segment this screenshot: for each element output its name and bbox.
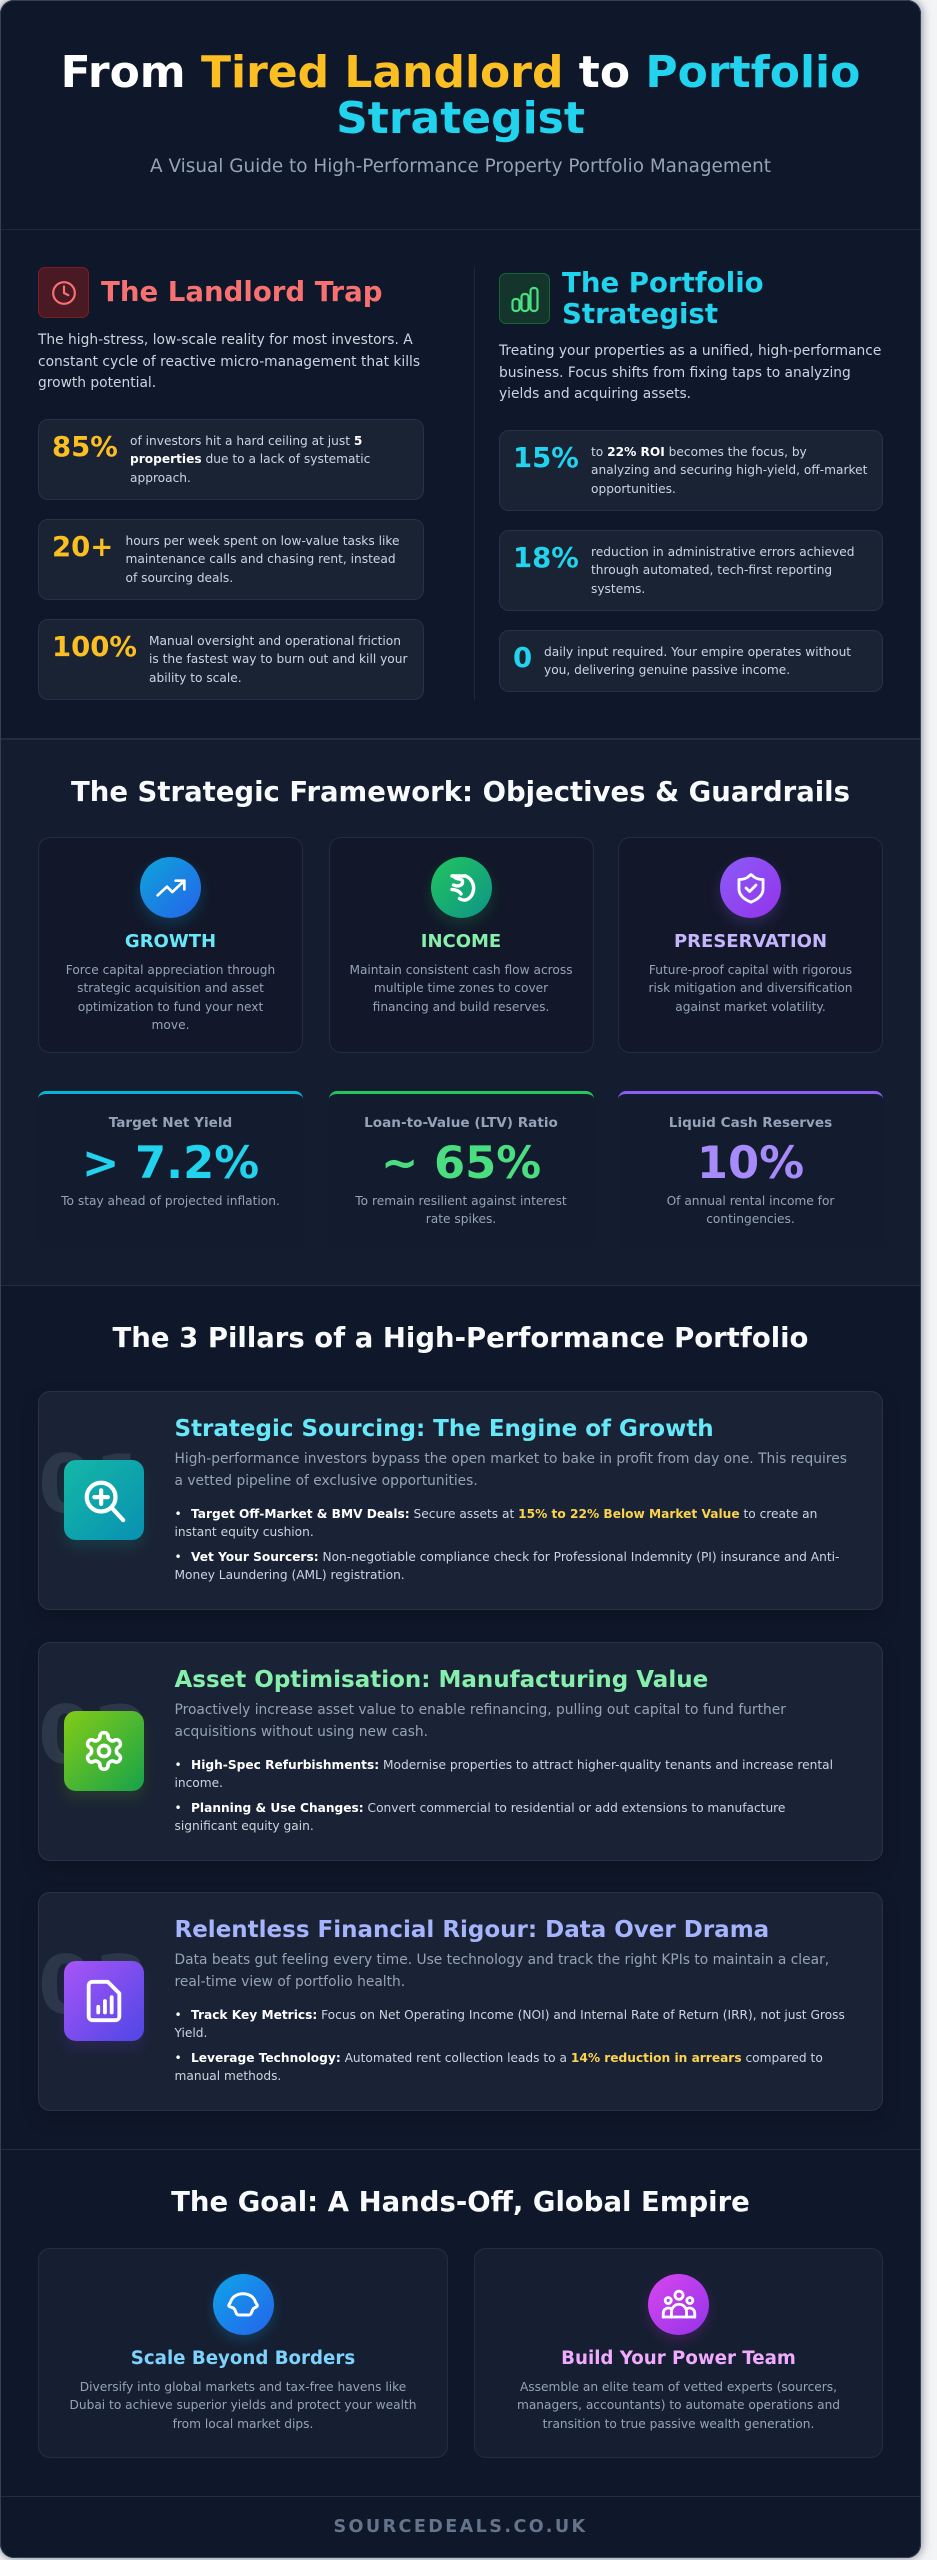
text: growth description: strategic acquisition and asset <box>77 981 264 995</box>
heading: strategic framework: The Strategic Framework: Objectives & Guardrails <box>71 776 850 808</box>
text: intro: Proactively increase asset value to enable refinancing, pulling out capital to fund further <box>174 1702 786 1718</box>
icon: income coin <box>430 857 492 918</box>
stat: 20+ <box>38 519 424 600</box>
text: income description: multiple time zones to cover <box>374 981 548 995</box>
stat: 0: daily input required. Your empire operates without <box>544 645 851 659</box>
icon: bar chart <box>499 273 550 324</box>
text: Diversify into global markets and tax-free havens like <box>80 2380 406 2394</box>
text: strategist intro: yields and acquiring assets. <box>499 386 691 402</box>
panel: the landlord trap <box>38 267 424 700</box>
stat: 100%: ability to scale. <box>149 671 242 685</box>
bullet: key metrics: • <box>174 2008 182 2022</box>
text: intro: real-time view of portfolio health. <box>174 1974 405 1990</box>
header panel <box>0 0 921 229</box>
metric value: 10% <box>697 1136 804 1189</box>
text: managers, accountants) to automate operations and <box>517 2398 840 2412</box>
subtitle: A Visual Guide to High-Performance Property Portfolio Management <box>150 156 771 177</box>
text: Assemble an elite team of vetted experts (sourcers, <box>520 2380 837 2394</box>
label: growth: GROWTH <box>125 931 216 952</box>
panel: landlord vs strategist comparison <box>0 229 921 739</box>
bullet: planning: Planning & Use Changes: Convert commercial to residential or add extensions to manufacture <box>191 1801 785 1815</box>
footer <box>0 2496 921 2558</box>
bullet: key metrics: Yield. <box>174 2026 207 2040</box>
card: growth <box>38 837 303 1053</box>
ghost number 03: 03 <box>38 1939 149 2032</box>
text: intro <box>174 1702 786 1740</box>
text: strategist intro: business. Focus shifts from fixing taps to analyzing <box>499 365 851 381</box>
text <box>69 2380 416 2431</box>
icon: gear <box>64 1711 144 1791</box>
bullet: technology: Leverage Technology: Automated rent collection leads to a 14% reduction in arrears compared to <box>191 2051 823 2065</box>
metric note: contingencies. <box>706 1212 795 1226</box>
ghost number 02: 02 <box>38 1689 149 1782</box>
text: preservation description: risk mitigation and diversification <box>648 981 853 995</box>
metric note <box>355 1194 567 1226</box>
metric note: Of annual rental income for <box>667 1194 834 1208</box>
stat: 85% <box>38 419 424 500</box>
heading: the portfolio strategist <box>562 266 764 330</box>
icon: search plus <box>64 1460 144 1540</box>
metric note: To remain resilient against interest <box>355 1194 567 1208</box>
heading: Strategic Sourcing: The Engine of Growth <box>174 1416 714 1442</box>
stat: 20+: maintenance calls and chasing rent, instead <box>126 552 396 566</box>
text: landlord intro: constant cycle of reactive micro-management that kills <box>38 354 420 370</box>
bullet: vet sourcers <box>174 1550 839 1582</box>
bullet: off-market deals: Target Off-Market & BMV Deals: Secure assets at 15% to 22% Below Market Value to create an <box>191 1507 817 1521</box>
bullet: refurbishments: High-Spec Refurbishments: Modernise properties to attract higher-quality tenants and increase rental <box>191 1758 833 1772</box>
text: Dubai to achieve superior yields and protect your wealth <box>69 2398 416 2412</box>
bullet: refurbishments: income. <box>174 1776 223 1790</box>
icon: report file <box>64 1961 144 2041</box>
stat: 20+: hours per week spent on low-value tasks like <box>126 534 400 548</box>
bullet: technology: • <box>174 2051 182 2065</box>
bullet: off-market deals <box>174 1507 817 1539</box>
bullet: refurbishments: • <box>174 1758 182 1772</box>
stat: 20+: of sourcing deals. <box>126 571 233 585</box>
stat: 15%: 15% <box>513 442 579 474</box>
heading: Relentless Financial Rigour: Data Over Drama <box>174 1917 769 1943</box>
card: scale beyond borders <box>38 2248 448 2458</box>
title <box>61 47 860 144</box>
stat: 85%: 85% <box>52 431 118 463</box>
text: income description <box>349 963 573 1014</box>
stat: 85%: of investors hit a hard ceiling at just 5 <box>130 434 362 448</box>
metric note: rate spikes. <box>426 1212 496 1226</box>
text: strategist intro: Treating your properties as a unified, high-performance <box>499 343 881 359</box>
bullet: refurbishments <box>174 1758 833 1790</box>
stat: 15%: opportunities. <box>591 482 676 496</box>
stat: 100%: Manual oversight and operational friction <box>149 634 401 648</box>
heading: three pillars: The 3 Pillars of a High-Performance Portfolio <box>113 1322 808 1354</box>
stat: 18% <box>499 530 883 611</box>
stat: 100%: 100% <box>52 631 137 663</box>
ghost number 01: 01 <box>38 1438 149 1531</box>
text: preservation description <box>648 963 853 1014</box>
icon: trending up <box>140 857 201 918</box>
panel: the goal <box>0 2149 921 2496</box>
bullet: planning: significant equity gain. <box>174 1819 314 1833</box>
metric: loan to value <box>328 1091 594 1248</box>
metric: liquid cash reserves <box>618 1091 883 1248</box>
heading: the portfolio strategist: Strategist <box>562 297 718 330</box>
metric: target net yield <box>38 1091 303 1248</box>
text: intro <box>174 1952 829 1990</box>
title: Strategist <box>336 93 585 144</box>
bullet: planning: • <box>174 1801 182 1815</box>
bullet: vet sourcers: Money Laundering (AML) registration. <box>174 1568 405 1582</box>
heading: Build Your Power Team <box>561 2348 796 2369</box>
heading: Asset Optimisation: Manufacturing Value <box>174 1667 708 1693</box>
bullet: vet sourcers: Vet Your Sourcers: Non-negotiable compliance check for Professional Indemnity (PI) insurance and Anti- <box>191 1550 839 1564</box>
card: build your power team <box>474 2248 883 2458</box>
metric value: > 7.2% <box>82 1136 259 1189</box>
stat: 85%: approach. <box>130 471 191 485</box>
text: strategist intro <box>498 343 881 402</box>
pillar: asset optimisation <box>38 1642 883 1861</box>
stat: 18%: systems. <box>591 582 645 596</box>
text: intro: acquisitions without using new cash. <box>174 1724 428 1740</box>
stat: 100%: is the fastest way to burn out and kill your <box>149 652 408 666</box>
text: preservation description: Future-proof capital with rigorous <box>649 963 852 977</box>
text: income description: financing and build reserves. <box>373 1000 549 1014</box>
title: From Tired Landlord to Portfolio <box>61 47 860 98</box>
text: income description: Maintain consistent cash flow across <box>349 963 573 977</box>
panel: three pillars <box>0 1285 921 2150</box>
metric note <box>667 1194 834 1226</box>
text: landlord intro: The high-stress, low-scale reality for most investors. A <box>38 332 413 348</box>
card: preservation <box>618 837 883 1053</box>
metric label: Loan-to-Value (LTV) Ratio <box>364 1115 558 1131</box>
heading: Scale Beyond Borders <box>131 2348 355 2369</box>
stat: 15%: analyzing and securing high-yield, off-market <box>591 463 867 477</box>
pillar: financial rigour <box>38 1892 883 2111</box>
metric note: To stay ahead of projected inflation. <box>61 1194 280 1208</box>
text: intro: Data beats gut feeling every time. Use technology and track the right KPIs to maintain a clear, <box>174 1952 829 1968</box>
panel: the portfolio strategist <box>498 266 883 692</box>
footer brand: SOURCEDEALS.CO.UK <box>333 2517 588 2537</box>
text <box>517 2380 840 2431</box>
stat: 15% <box>499 430 883 511</box>
bullet: off-market deals: • <box>174 1507 182 1521</box>
label: preservation: PRESERVATION <box>674 931 827 952</box>
card: income <box>328 837 594 1053</box>
panel: strategic framework <box>0 738 921 1286</box>
text: intro: a vetted pipeline of exclusive opportunities. <box>174 1473 478 1489</box>
stat: 18%: reduction in administrative errors achieved <box>591 545 854 559</box>
text: landlord intro: growth potential. <box>38 375 156 391</box>
icon: shield check <box>720 857 781 918</box>
bullet: technology: manual methods. <box>174 2069 281 2083</box>
icon: globe <box>212 2274 274 2335</box>
text: transition to true passive wealth generation. <box>543 2417 814 2431</box>
text: growth description: Force capital appreciation through <box>66 963 275 977</box>
column divider line <box>474 267 475 700</box>
text: landlord intro <box>38 332 420 391</box>
stat: 15%: to 22% ROI becomes the focus, by <box>591 445 807 459</box>
label: income: INCOME <box>421 931 501 952</box>
bullet: off-market deals: instant equity cushion. <box>174 1525 314 1539</box>
heading: the goal: The Goal: A Hands-Off, Global Empire <box>171 2186 750 2218</box>
text: intro <box>174 1451 847 1489</box>
stat: 18%: through automated, tech-first reporting <box>591 563 832 577</box>
metric label: Target Net Yield <box>109 1115 232 1131</box>
text: growth description <box>66 963 275 1032</box>
heading: the portfolio strategist: The Portfolio <box>562 266 764 299</box>
bullet: technology <box>174 2051 823 2083</box>
text: growth description: move. <box>152 1018 189 1032</box>
stat: 0 <box>499 630 883 692</box>
bullet: key metrics: Track Key Metrics: Focus on Net Operating Income (NOI) and Internal Rate of Return (IRR), not just Gross <box>191 2008 845 2022</box>
stat: 0: you, delivering genuine passive income. <box>544 663 790 677</box>
stat: 20+: 20+ <box>52 531 113 563</box>
stat: 100% <box>38 619 424 700</box>
heading: the landlord trap: The Landlord Trap <box>101 275 383 308</box>
metric label: Liquid Cash Reserves <box>669 1115 832 1131</box>
icon: team <box>648 2274 709 2335</box>
bullet: key metrics <box>174 2008 845 2040</box>
bullet: vet sourcers: • <box>174 1550 182 1564</box>
pillar: strategic sourcing <box>38 1391 883 1610</box>
text: growth description: optimization to fund your next <box>78 1000 263 1014</box>
bullet: planning <box>174 1801 785 1833</box>
stat: 18%: 18% <box>513 542 579 574</box>
text: preservation description: against market volatility. <box>675 1000 826 1014</box>
text: from local market dips. <box>173 2417 313 2431</box>
stat: 85%: properties due to a lack of systematic <box>130 452 370 466</box>
text: intro: High-performance investors bypass the open market to bake in profit from day one. This requires <box>174 1451 847 1467</box>
stat: 0: 0 <box>513 642 532 674</box>
metric value: ~ 65% <box>381 1136 541 1189</box>
icon: clock <box>38 267 89 318</box>
